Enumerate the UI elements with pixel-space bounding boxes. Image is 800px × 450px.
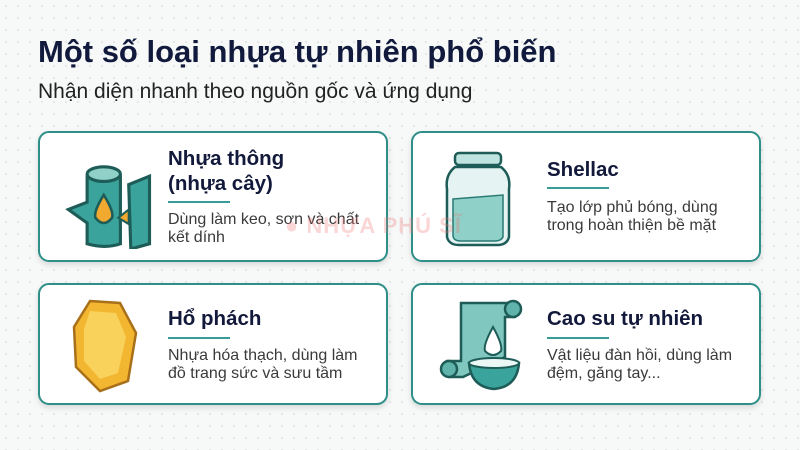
text (547, 347, 732, 382)
text: Nhựa hóa thạch, dùng làm (168, 347, 358, 364)
panel: cao su (411, 283, 761, 405)
text: trong hoàn thiện bề mặt (547, 217, 716, 234)
heading: Hổ phách (168, 307, 261, 330)
icon: amber (72, 300, 138, 392)
panel: shellac (411, 131, 761, 262)
text (168, 211, 359, 246)
text: đồ trang sức và sưu tầm (168, 365, 342, 382)
text: đệm, găng tay... (547, 365, 661, 382)
text: Tạo lớp phủ bóng, dùng (547, 199, 718, 216)
icon: jar (445, 152, 511, 246)
panel: nhua thong (38, 131, 388, 262)
icon: scroll and bowl (440, 300, 522, 390)
subtitle: Nhận diện nhanh theo nguồn gốc và ứng dụng (38, 80, 472, 103)
text: Dùng làm keo, sơn và chất (168, 211, 359, 228)
title: Một số loại nhựa tự nhiên phổ biến (38, 34, 556, 69)
icon: tree log (65, 165, 152, 249)
text: Vật liệu đàn hồi, dùng làm (547, 347, 732, 364)
panel: ho phach (38, 283, 388, 405)
heading: Nhựa thông (168, 147, 284, 170)
watermark: ● NHỰA PHÚ SĨ (285, 213, 462, 238)
heading (168, 147, 284, 195)
text (168, 347, 358, 382)
heading: Cao su tự nhiên (547, 307, 703, 330)
heading: (nhựa cây) (168, 172, 273, 195)
text: kết dính (168, 229, 225, 246)
heading: Shellac (547, 158, 619, 181)
text (547, 199, 718, 234)
